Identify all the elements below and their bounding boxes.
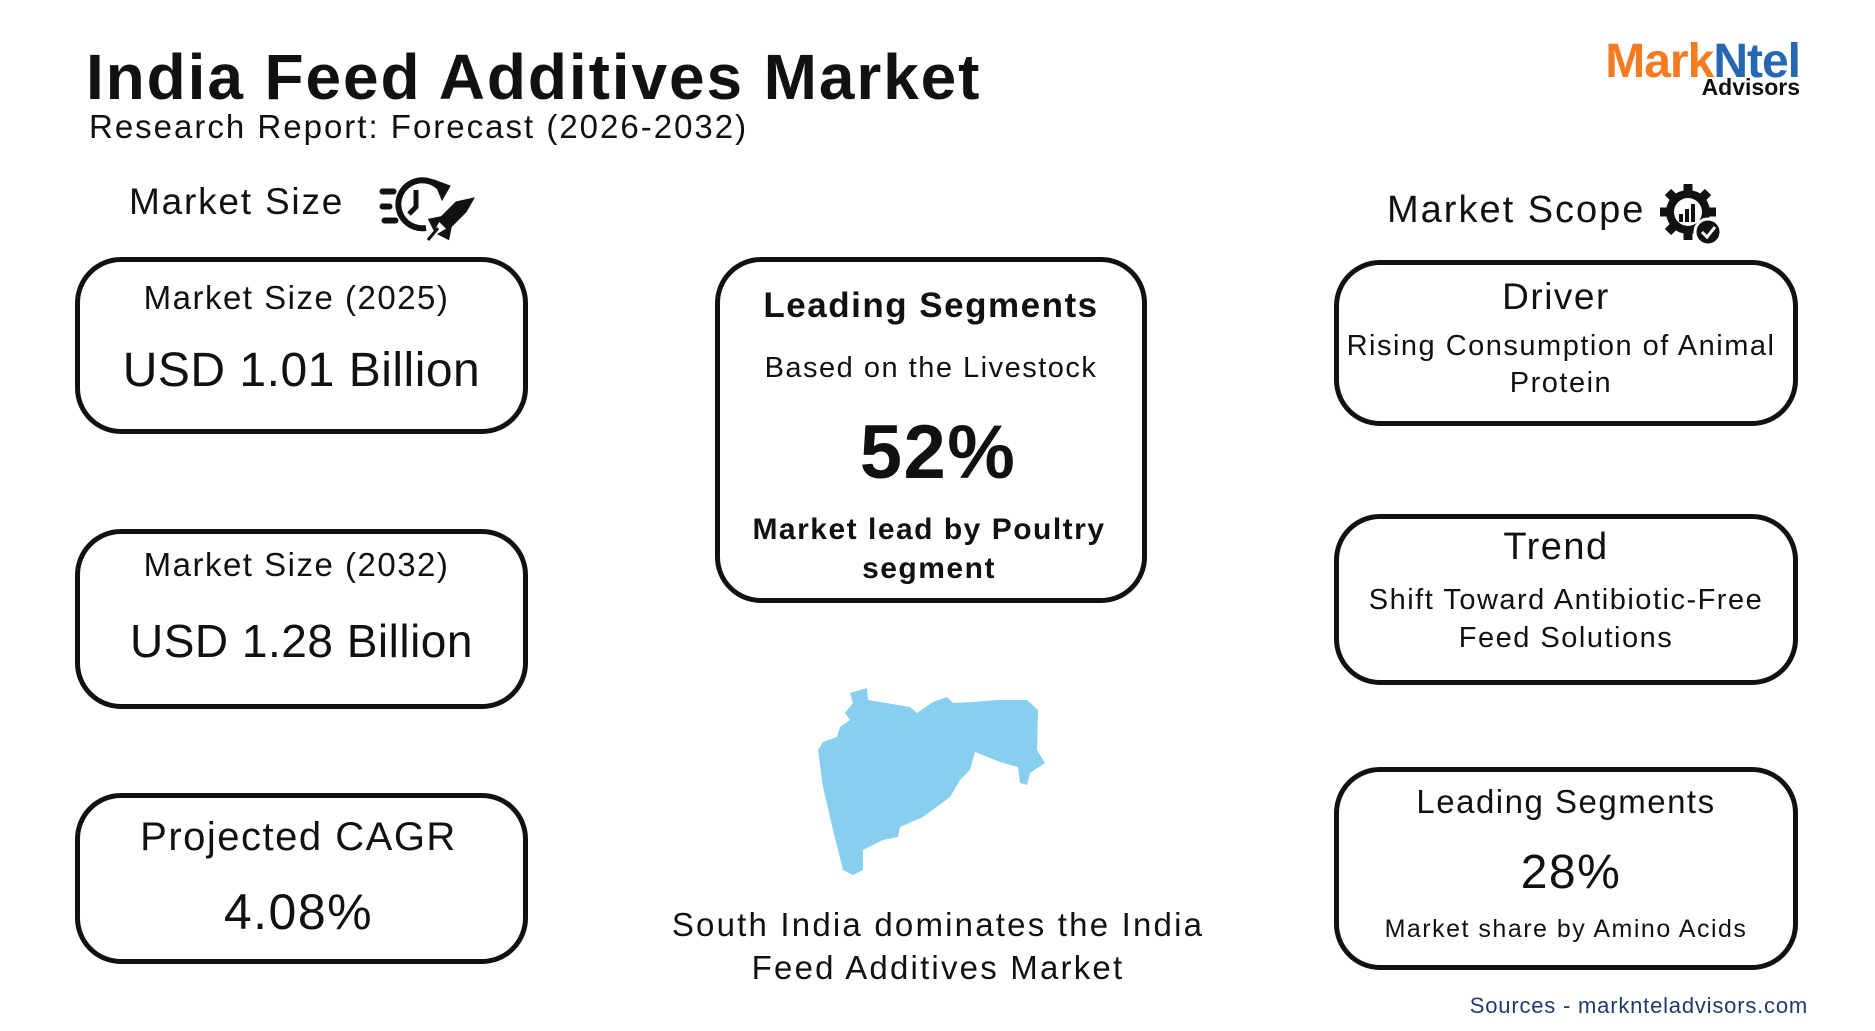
panel: leading segments amino acids: Market share by Amino Acids — [1385, 915, 1747, 943]
panel: driver — [1334, 260, 1798, 426]
panel: leading segments livestock: Leading Segments — [763, 286, 1099, 325]
logo: MarkNtel — [1605, 35, 1800, 88]
panel: trend: Shift Toward Antibiotic-Free — [1369, 584, 1763, 616]
panel: leading segments livestock: 52% — [860, 410, 1016, 495]
panel: leading segments livestock: Market lead by Poultry — [752, 513, 1106, 546]
panel: market size 2032 — [75, 529, 528, 709]
subtitle: Research Report: Forecast (2026-2032) — [89, 108, 748, 145]
panel: market size 2032: Market Size (2032) — [144, 546, 449, 583]
panel: CAGR: 4.08% — [224, 884, 373, 940]
panel: leading segments amino acids: 28% — [1521, 846, 1621, 899]
panel: driver: Rising Consumption of Animal — [1347, 330, 1775, 362]
heading: market scope: Market Scope — [1387, 189, 1645, 231]
panel: market size 2025: USD 1.01 Billion — [123, 344, 480, 397]
panel: market size 2025: Market Size (2025) — [144, 279, 449, 316]
panel: CAGR — [75, 793, 528, 964]
icon: clock rocket — [380, 177, 475, 241]
panel: trend — [1334, 514, 1798, 685]
icon: gear chart check — [1660, 184, 1720, 244]
panel: CAGR: Projected CAGR — [140, 815, 457, 859]
text: south india: Feed Additives Market — [752, 949, 1124, 986]
heading: market size: Market Size — [129, 181, 344, 222]
panel: trend: Feed Solutions — [1459, 622, 1673, 654]
panel: market size 2025 — [75, 257, 528, 434]
panel: leading segments livestock — [715, 257, 1147, 603]
panel: market size 2032: USD 1.28 Billion — [130, 615, 473, 667]
panel: leading segments livestock: segment — [862, 552, 996, 585]
panel: driver: Protein — [1510, 367, 1612, 399]
map: region — [818, 688, 1045, 875]
panel: driver: Driver — [1502, 276, 1610, 317]
text: south india — [672, 906, 1204, 986]
panel: leading segments amino acids — [1334, 767, 1798, 970]
title: India Feed Additives Market — [86, 41, 981, 113]
panel: leading segments livestock: Based on the Livestock — [765, 352, 1097, 384]
logo: Advisors — [1702, 74, 1800, 100]
text: south india: South India dominates the India — [672, 906, 1204, 943]
sources: Sources - marknteladvisors.com — [1470, 993, 1808, 1018]
panel: leading segments amino acids: Leading Segments — [1416, 783, 1716, 820]
panel: trend: Trend — [1503, 526, 1609, 568]
